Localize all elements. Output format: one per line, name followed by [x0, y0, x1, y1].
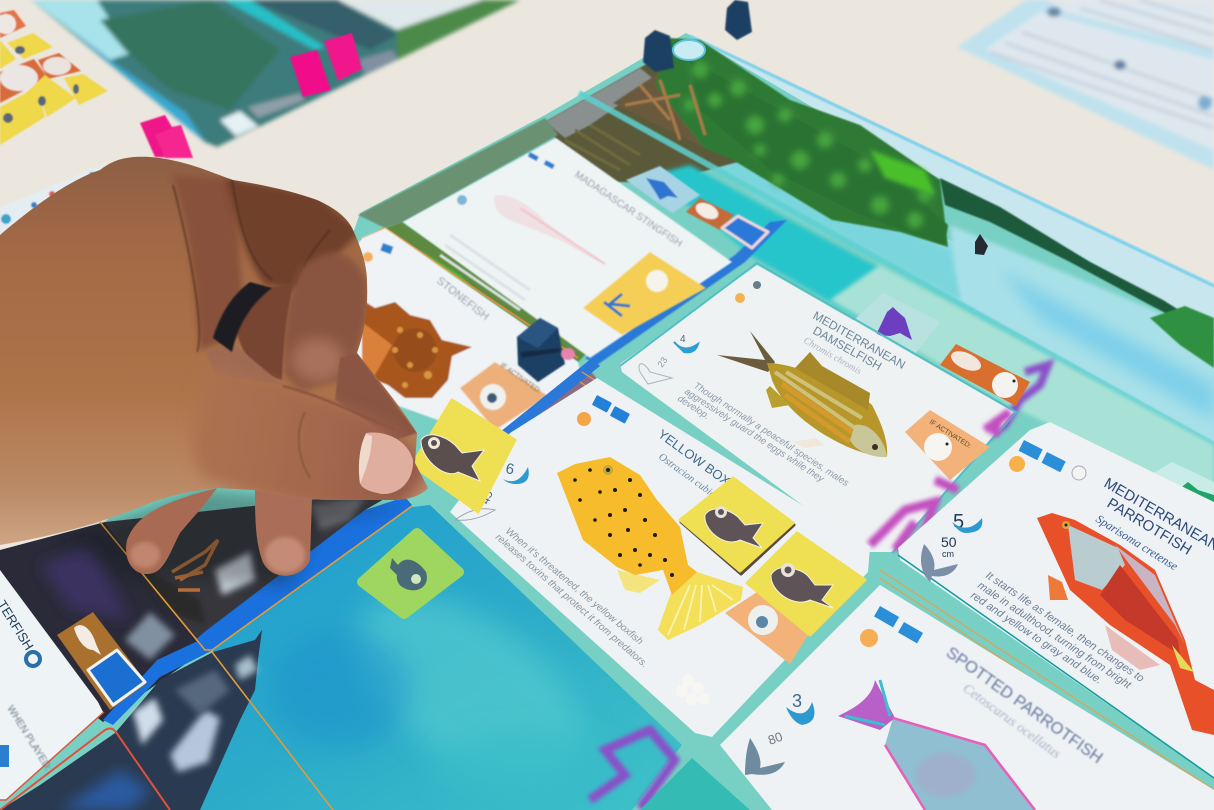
lagoon water panel: [200, 505, 682, 810]
saturated teal water under band: [640, 165, 920, 325]
fish: Mediterranean parrotfish: [1037, 513, 1214, 735]
back of hand: [0, 150, 440, 550]
blue band under stonefish card: [500, 358, 600, 438]
card: yellow boxfish: [450, 378, 870, 737]
card: Mediterranean damselfish: [620, 263, 1016, 553]
rulebook sheet top right: [957, 0, 1214, 170]
card: spotted parrotfish: 3: [792, 691, 802, 711]
small white disc near meeple: [673, 40, 705, 60]
person on the shore: [975, 234, 988, 255]
orange tile right with eye: [940, 344, 1048, 438]
shadow under hand: [60, 490, 400, 585]
card: Mediterranean damselfish: IF ACTIVATED:: [928, 419, 972, 450]
left rocky panels: [0, 490, 682, 810]
yellow tile 1: [680, 478, 794, 574]
card: Mediterranean parrotfish: 50: [941, 534, 957, 550]
card: Madagascar stingfish: [403, 138, 732, 358]
coral print: [870, 412, 1010, 550]
blue strip lower: [103, 640, 213, 725]
description: damselfish: Though normally a peaceful species, males: [691, 380, 851, 489]
yellow tile: held under fingers: [412, 400, 515, 512]
pink tab beside meeple: [561, 348, 575, 360]
knuckle finger 1: [172, 175, 243, 350]
title: spotted parrotfish: SPOTTED PARROTFISH: [943, 644, 1106, 767]
card: Mediterranean parrotfish: cm: [942, 549, 954, 559]
coral border between cards: [510, 370, 600, 448]
card: spotted parrotfish: 80: [766, 729, 785, 748]
thumb top edge: [282, 384, 368, 418]
when played label: WHEN PLAYED:: [4, 704, 53, 773]
fish: spotted parrotfish: [838, 680, 1035, 810]
tile slot: purple fins: [852, 293, 940, 354]
card: yellow boxfish: 6: [504, 460, 515, 478]
card: yellow boxfish: 45: [478, 488, 496, 506]
orange action tile with blue square: [585, 198, 787, 365]
blue meeple: on board near stonefish: [517, 318, 565, 382]
mangrove island: [545, 38, 1214, 368]
card: stonefish: STONEFISH: [434, 275, 491, 323]
title: damselfish: DAMSELFISH: [811, 323, 884, 373]
crease lines: [173, 180, 330, 352]
card: Mediterranean parrotfish: 5: [953, 511, 964, 533]
card: left partial: [0, 570, 147, 800]
sea divider band: [579, 93, 1214, 445]
second fingertip behind thumb: [335, 353, 417, 440]
description: Mediterranean parrotfish: red and yellow to gray and blue.: [968, 590, 1104, 687]
tile: if activated: [905, 410, 990, 480]
latin name: spotted parrotfish: Cetoscarus ocellatus: [960, 681, 1064, 762]
thumb nail: [359, 432, 413, 494]
frog-like coral: [172, 540, 218, 590]
finger tip pointing down: [283, 253, 368, 392]
thumb: [194, 374, 426, 500]
pink meeples: [140, 33, 362, 158]
card: stonefish: [340, 228, 582, 432]
card: spotted parrotfish: [720, 585, 1214, 810]
mangrove corner base: [545, 62, 745, 182]
card: Mediterranean damselfish: 23: [655, 355, 669, 369]
tile slot: green fins: [1145, 462, 1214, 525]
tile slot: blue rays: [626, 166, 700, 213]
gutter orange lines: [580, 372, 1214, 800]
description: yellow boxfish: When it's threatened, the yellow boxfish: [503, 526, 645, 648]
blue meeples: top of board: [643, 0, 752, 72]
card: stonefish: IF ACTIVATED:: [499, 362, 542, 395]
yellow tile 2: [747, 533, 865, 635]
description: damselfish: develop.: [675, 393, 711, 422]
coral strip top left edge of board: [358, 118, 558, 228]
second player board top left: [31, 0, 520, 147]
sky strip: [686, 33, 1214, 330]
orange border lines: [100, 506, 412, 810]
small finger below ring: [237, 285, 293, 380]
thumb crease: [299, 412, 310, 478]
yellow and orange tile stack top left: [0, 10, 108, 145]
web under ring: [206, 346, 278, 383]
latin name: Mediterranean parrotfish: Sparisoma cretense: [1093, 512, 1181, 574]
description: Mediterranean parrotfish: It starts life as female, then changes to: [983, 570, 1146, 685]
ring: [213, 282, 272, 352]
title: yellow boxfish: YELLOW BOXFISH: [655, 426, 757, 506]
dark finger 2: [225, 178, 360, 290]
latin name: damselfish: Chromis chromis: [802, 336, 863, 377]
blue strip upper: [195, 497, 412, 650]
title: Mediterranean parrotfish: PARROTFISH: [1104, 495, 1195, 559]
description: yellow boxfish: releases toxins that protect it from predators.: [493, 532, 650, 670]
icon: white school of fish: [676, 675, 710, 705]
green fish tile: [362, 533, 459, 614]
hand holding tile: [0, 150, 440, 585]
activation tile: [725, 590, 808, 664]
left small card strip: [0, 163, 107, 240]
lower rock: [0, 630, 262, 810]
title: damselfish: MEDITERRANEAN: [811, 308, 908, 372]
card: Mediterranean parrotfish: [898, 422, 1214, 778]
card: Mediterranean damselfish: 4: [680, 334, 686, 345]
fish: damselfish: [717, 331, 887, 457]
fish: yellow boxfish: [557, 457, 743, 640]
pale sea under upper row: [830, 265, 1214, 520]
sea scene: [579, 93, 1214, 445]
lower fingers: [126, 488, 217, 574]
description: Mediterranean parrotfish: male in adulthood, turning from bright: [975, 580, 1134, 692]
small teal panel bottom centre: [640, 758, 750, 810]
description: damselfish: aggressively guard the eggs while they: [682, 386, 827, 485]
card: Madagascar stingfish: MADAGASCAR STINGFISH: [572, 169, 684, 250]
purple reef print bottom: [590, 730, 675, 808]
latin name: yellow boxfish: Ostracion cubicus: [656, 452, 725, 506]
